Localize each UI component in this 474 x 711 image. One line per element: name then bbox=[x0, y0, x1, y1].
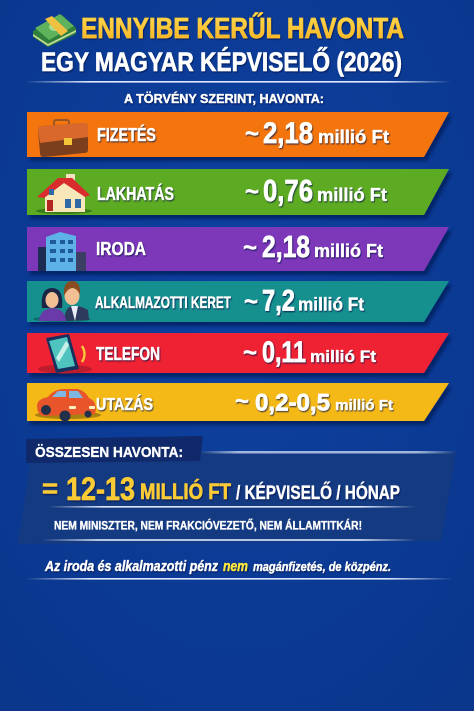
value: millió Ft bbox=[314, 241, 383, 261]
label: LAKHATÁS bbox=[97, 183, 174, 204]
value: millió Ft bbox=[317, 185, 387, 205]
row: fizetés bbox=[27, 112, 449, 157]
icon: briefcase bbox=[38, 120, 88, 157]
icon: two people bbox=[33, 281, 91, 322]
value: ~ bbox=[245, 176, 259, 206]
row: lakhatás bbox=[27, 169, 449, 215]
value bbox=[245, 173, 387, 208]
title bbox=[41, 11, 404, 77]
note: NEM MINISZTER, NEM FRAKCIÓVEZETŐ, NEM ÁLLAMTITKÁR! bbox=[54, 518, 362, 532]
value: 0,2-0,5 bbox=[255, 390, 330, 416]
value: 7,2 bbox=[262, 284, 295, 318]
total amount: 12-13 bbox=[66, 471, 135, 507]
value: millió Ft bbox=[335, 397, 393, 414]
heading tab bbox=[26, 436, 456, 463]
icon: phone bbox=[38, 334, 92, 374]
row: telefon bbox=[27, 333, 449, 374]
total amount: MILLIÓ FT bbox=[140, 479, 231, 504]
value: 0,76 bbox=[263, 173, 313, 208]
footnote bbox=[44, 559, 391, 575]
title line 2: EGY MAGYAR KÉPVISELŐ (2026) bbox=[41, 47, 402, 77]
value bbox=[244, 284, 364, 318]
value: ~ bbox=[245, 118, 259, 148]
row: iroda bbox=[27, 227, 449, 271]
value bbox=[243, 336, 376, 369]
icon: office building bbox=[38, 232, 86, 271]
footnote: Az iroda és alkalmazotti pénz bbox=[44, 559, 219, 575]
label: ALKALMAZOTTI KERET bbox=[95, 293, 231, 312]
value: ~ bbox=[244, 286, 258, 316]
row: alkalmazotti keret bbox=[27, 281, 449, 322]
label: IRODA bbox=[96, 239, 146, 259]
value: millió Ft bbox=[318, 127, 389, 147]
footnote: nem bbox=[223, 559, 248, 575]
subtitle: A TÖRVÉNY SZERINT, HAVONTA: bbox=[124, 91, 324, 106]
value: ~ bbox=[235, 388, 249, 415]
label: FIZETÉS bbox=[97, 124, 156, 145]
value: 0,11 bbox=[262, 336, 306, 369]
value: 2,18 bbox=[262, 229, 310, 264]
heading tab: ÖSSZESEN HAVONTA: bbox=[35, 444, 183, 461]
value: ~ bbox=[243, 232, 257, 262]
value: millió Ft bbox=[310, 347, 376, 366]
footnote: magánfizetés, de közpénz. bbox=[253, 560, 391, 574]
total amount: = bbox=[42, 473, 58, 503]
value: ~ bbox=[243, 337, 257, 367]
total amount: / KÉPVISELŐ / HÓNAP bbox=[236, 480, 400, 504]
icon: car bbox=[35, 389, 101, 422]
row: utazás bbox=[27, 383, 449, 422]
icon: house bbox=[36, 174, 92, 214]
panel: total bbox=[18, 436, 456, 544]
label: TELEFON bbox=[96, 344, 160, 364]
value bbox=[235, 388, 393, 416]
label: UTAZÁS bbox=[96, 393, 153, 414]
icon: money stack bbox=[33, 14, 76, 47]
value bbox=[243, 229, 383, 264]
title line 1: ENNYIBE KERŰL HAVONTA bbox=[81, 11, 404, 45]
total amount bbox=[42, 471, 400, 507]
value: millió Ft bbox=[298, 294, 364, 314]
value: 2,18 bbox=[263, 117, 313, 150]
value bbox=[245, 117, 389, 150]
